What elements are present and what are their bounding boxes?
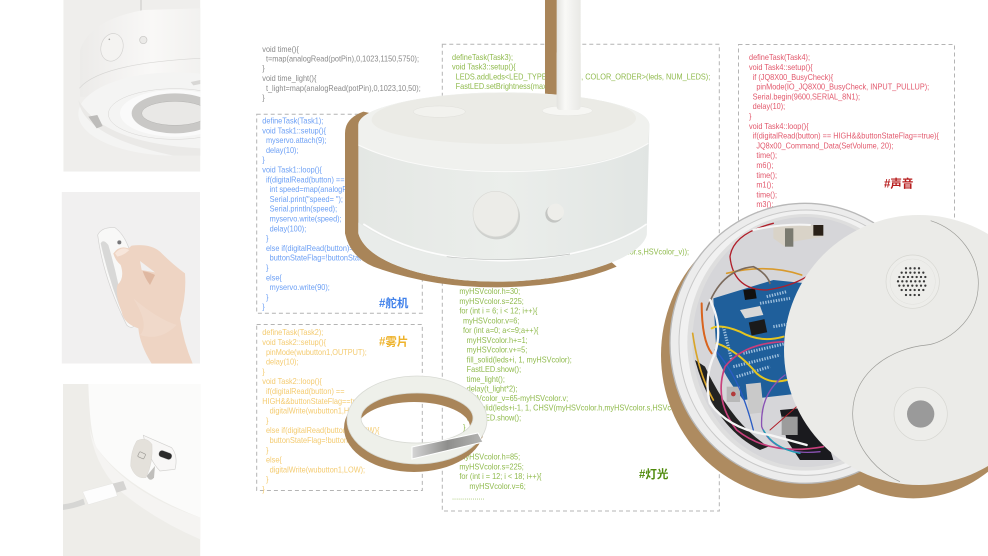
code: atomizer task: }: [262, 367, 265, 376]
large knob: [473, 191, 520, 239]
code: light task: delay(t_light*2);: [467, 384, 518, 394]
code: light task: FastLED.setBrightness(max_bright);: [456, 82, 574, 91]
code: servo task: void Task1::setup(){: [262, 126, 326, 135]
code: light task: ................: [452, 492, 485, 502]
label: light tag: #灯光: [639, 467, 669, 481]
label: atomizer tag: #雾片: [379, 334, 408, 348]
code: servo task: [262, 116, 390, 312]
code: light task: FastLED.show();: [467, 413, 521, 423]
code: light task: }: [463, 423, 466, 432]
code: atomizer task: [262, 328, 381, 494]
code: atomizer task: HIGH&&buttonStateFlag==true){: [262, 397, 368, 406]
photo: USB-C charging port: [63, 384, 200, 556]
code: atomizer task: }: [262, 485, 265, 494]
code: light task: myHSVcolor.s=225;: [459, 462, 524, 472]
code: atomizer task: digitalWrite(wubutton1,HIGH);: [270, 406, 367, 416]
code: sound task: if(digitalRead(button) == HIGH&&buttonStateFlag==true){: [753, 131, 939, 141]
code: sound task: Serial.begin(9600,SERIAL_8N1);: [753, 92, 860, 101]
code: servo task: }: [266, 263, 269, 273]
lamp stem: [557, 0, 581, 112]
code: light task: fill_solid(leds+i, 1, myHSVcolor);: [467, 355, 572, 365]
code: servo task: if(digitalRead(button) == HIGH){: [266, 175, 370, 184]
speaker grille: [886, 255, 939, 308]
code: sound task: m3();: [756, 200, 773, 209]
code: atomizer task: defineTask(Task2);: [262, 328, 323, 337]
code: atomizer task: void Task2::loop(){: [262, 377, 322, 386]
code: light task: FastLED.show();: [467, 365, 521, 374]
code: light task: for (int i = 6; i < 12; i++){: [459, 306, 538, 316]
code: sound task: void Task4::loop(){: [749, 122, 809, 131]
lamp body: [358, 92, 649, 282]
code: servo task: defineTask(Task1);: [262, 116, 323, 126]
code: light task: HSVcolor_v=65-myHSVcolor.v;: [467, 394, 568, 403]
small button: [545, 204, 564, 223]
code: servo task: delay(100);: [270, 224, 306, 233]
code: servo task: Serial.print("speed= ");: [270, 195, 343, 204]
label: sound tag: #声音: [884, 176, 913, 190]
code: sound task: time();: [756, 190, 777, 199]
code: light task: fill_solid(leds+i-1, 1, CHSV(myHSVcolor.h,myHSVcolor.s,HSVcolor_v));: [467, 403, 698, 413]
code: time functions: void time(){: [262, 45, 299, 54]
code: light task: myHSVcolor.v=6;: [463, 316, 519, 326]
code: servo task: myservo.attach(9);: [266, 136, 327, 145]
code: time functions: t=map(analogRead(potPin),0,1023,1150,5750);: [266, 54, 419, 64]
code: atomizer task: pinMode(wubutton1,OUTPUT);: [266, 348, 367, 357]
code: servo task: }: [266, 234, 269, 243]
code: servo task: else if(digitalRead(button)==LOW){: [266, 244, 380, 253]
lamp shadow: [345, 0, 617, 287]
code: light task: LEDS.addLeds<LED_TYPE, LED_PIN, COLOR_ORDER>(leds, NUM_LEDS);: [456, 72, 710, 82]
code: sound task: void Task4::setup(){: [749, 63, 813, 72]
code: light task: myHSVcolor.v+=5;: [467, 345, 527, 355]
code: atomizer task: void Task2::setup(){: [262, 338, 326, 347]
ring slot: [412, 433, 483, 459]
panel: atomizer code box: [257, 324, 422, 490]
code: light task: myHSVcolor.h=85;: [459, 452, 520, 462]
code: sound task: m6();: [756, 161, 773, 170]
code: sound task: JQ8x00_Command_Data(SetVolume, 20);: [756, 141, 893, 150]
code: atomizer task: else{: [266, 455, 282, 465]
code: time functions: }: [262, 93, 265, 103]
ring shadow: [344, 384, 484, 472]
illustration: open base with circuit: [661, 203, 988, 498]
code: time functions: [262, 45, 421, 103]
code: sound task: }: [749, 112, 752, 121]
code: servo task: buttonStateFlag=!buttonStateFlag;: [270, 253, 381, 263]
code: sound task: pinMode(IO_JQ8X00_BusyCheck, INPUT_PULLUP);: [756, 82, 929, 92]
code: light task: fill_solid(leds+i, 1, CHSV(myHSVcolor.h,myHSVcolor.s,HSVcolor_v));: [464, 247, 689, 257]
label: servo tag: #舵机: [379, 296, 409, 310]
lamp top plate: [372, 93, 636, 144]
code: servo task: Serial.println(speed);: [270, 204, 337, 214]
illustration: lamp base: [345, 0, 649, 287]
code: sound task: m1();: [756, 180, 773, 190]
code: atomizer task: buttonStateFlag=!buttonStateFlag;: [270, 436, 381, 445]
code: servo task: myservo.write(speed);: [270, 214, 342, 224]
panel: servo code box: [257, 114, 422, 313]
code: sound task: time();: [756, 151, 777, 160]
panel: light code box: [442, 44, 719, 511]
code: light task: void Task3::setup(){: [452, 62, 516, 72]
code: time functions: void time_light(){: [262, 74, 317, 83]
code: sound task: if (JQ8X00_BusyCheck){: [753, 73, 834, 82]
code: light task: for (int a=0; a<=9;a++){: [463, 326, 539, 335]
cover shadow: [787, 222, 988, 498]
interior: [692, 217, 919, 467]
code: time functions: t_light=map(analogRead(potPin),0,1023,10,50);: [266, 84, 421, 93]
code: atomizer task: else if(digitalRead(button)==LOW){: [266, 426, 380, 435]
code: light task: myHSVcolor.h+=1;: [467, 336, 528, 345]
code: atomizer task: digitalWrite(wubutton1,LOW);: [270, 465, 365, 474]
yin-yang cover: [784, 215, 988, 485]
code: atomizer task: }: [266, 416, 269, 425]
code: servo task: }: [262, 155, 265, 165]
circuit boards: [713, 225, 833, 460]
wires: [693, 223, 823, 453]
code: servo task: }: [262, 302, 265, 312]
code: atomizer task: delay(10);: [266, 357, 299, 367]
code: time functions: }: [262, 64, 265, 73]
code: sound task: defineTask(Task4);: [749, 53, 810, 62]
code: sound task: [749, 53, 939, 219]
outer shell: [670, 203, 940, 483]
ring body: [347, 376, 487, 464]
code: atomizer task: }: [266, 475, 269, 484]
code: atomizer task: if(digitalRead(button) ==: [266, 387, 345, 396]
code: atomizer task: }: [266, 446, 269, 455]
circuit shadow: [661, 212, 939, 498]
code: servo task: delay(10);: [266, 146, 299, 155]
code: servo task: }: [266, 293, 269, 302]
code: servo task: void Task1::loop(){: [262, 165, 322, 175]
code: servo task: int speed=map(analogRead(potPin));: [270, 185, 390, 194]
code: light task: time_light();: [467, 375, 505, 384]
code: sound task: time();: [756, 171, 777, 180]
code: light task: myHSVcolor.h=30;: [459, 287, 520, 296]
illustration: mist ring: [344, 376, 487, 472]
panel: sound code box: [738, 44, 954, 470]
code: light task: [452, 53, 710, 502]
code: servo task: else{: [266, 273, 282, 282]
code: sound task: delay(10);: [753, 102, 785, 111]
photo: hand holding ring: [62, 192, 200, 364]
cable hole: [894, 387, 947, 441]
cover seam: [853, 221, 978, 482]
photo: lamp underside: [64, 0, 200, 172]
code: light task: myHSVcolor.s=225;: [459, 297, 524, 306]
code: light task: for (int i = 12; i < 18; i++){: [459, 472, 542, 481]
code: sound task: time();: [756, 210, 777, 219]
code: light task: myHSVcolor.v=6;: [469, 482, 526, 491]
code: light task: defineTask(Task3);: [452, 53, 513, 62]
code: servo task: myservo.write(90);: [270, 283, 330, 292]
